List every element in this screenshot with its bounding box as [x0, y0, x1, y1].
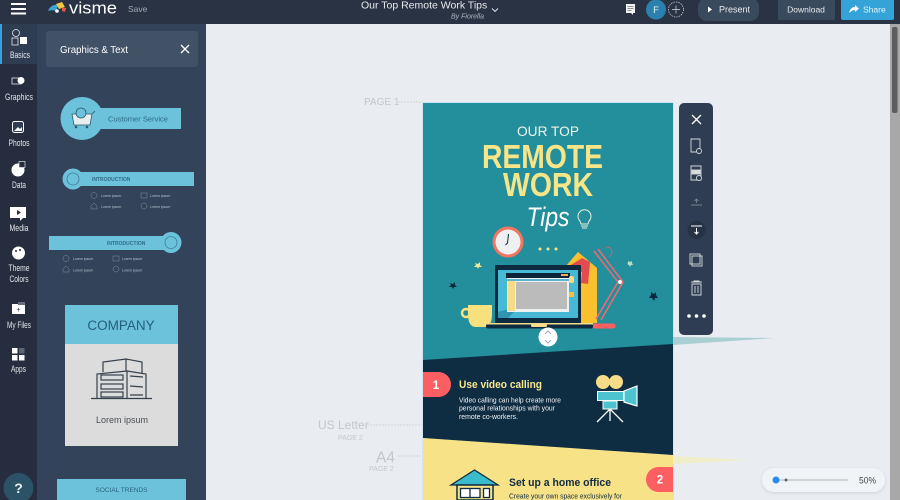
- icon: coffee cup: [462, 305, 492, 327]
- document title: [361, 0, 498, 20]
- template: introduction left: Lorem ipsum: [122, 268, 142, 272]
- icon: video camera: [596, 375, 637, 422]
- panel: left rail: [0, 24, 37, 500]
- icon: more: [687, 314, 706, 318]
- house shape behind laptop: [566, 252, 597, 323]
- panel: canvas page labels: A4: [376, 450, 395, 466]
- template: company card: [65, 305, 178, 446]
- rail item: my files: [7, 302, 31, 331]
- zoom control: [762, 468, 885, 492]
- avatar: [646, 0, 666, 20]
- icon: comment: [626, 4, 635, 15]
- title: REMOTE: [482, 138, 603, 175]
- zoom control: 50%: [859, 476, 876, 486]
- badge 2: 2: [657, 472, 664, 486]
- text block: remote co-workers.: [459, 412, 518, 421]
- template: social trends: [57, 479, 186, 500]
- section: home office band: [423, 438, 673, 500]
- panel: top bar: [0, 0, 900, 24]
- template: introduction left: [49, 232, 182, 272]
- icon: close: [692, 115, 701, 124]
- text block: Video calling can help create more: [459, 396, 561, 404]
- heading: graphics and text: Graphics & Text: [60, 44, 128, 56]
- rail item: theme colors: Colors: [10, 274, 29, 285]
- template: introduction left: Lorem ipsum: [73, 268, 93, 272]
- icon: building: [91, 359, 152, 398]
- rail item: basics: [10, 30, 30, 61]
- template: company card: COMPANY: [87, 318, 155, 333]
- badge 1: [423, 372, 451, 397]
- template: company card: Lorem ipsum: [96, 415, 148, 425]
- icon: wall clock: [492, 226, 524, 258]
- rail item: graphics: [5, 77, 33, 103]
- template: introduction right: Lorem ipsum: [150, 194, 170, 198]
- icon: laptop: [486, 265, 593, 328]
- icon: light bulb: [578, 210, 591, 228]
- rail item: apps: [11, 348, 26, 375]
- icon: house: [451, 470, 498, 500]
- template: introduction left: INTRODUCTION: [107, 241, 146, 247]
- panel: left content panel: [37, 24, 206, 500]
- panel: canvas page labels: PAGE 2: [338, 435, 363, 442]
- rail item: data: Data: [12, 180, 26, 191]
- template: introduction left: Lorem ipsum: [73, 257, 93, 261]
- logo: [48, 0, 117, 18]
- heading: Use video calling: [459, 379, 542, 391]
- document title: By Fiorella: [451, 14, 484, 20]
- button: share: Share: [863, 4, 886, 14]
- title: Tips: [526, 202, 570, 232]
- section: video calling band: [423, 344, 673, 456]
- rail item: my files: +: [16, 307, 21, 314]
- heading: Set up a home office: [509, 477, 611, 489]
- title: [482, 123, 603, 232]
- rail item: media: Media: [10, 223, 29, 234]
- icon: trash: [691, 281, 702, 295]
- rail item: media: [10, 207, 29, 234]
- avatar: F: [653, 5, 659, 16]
- title: WORK: [503, 166, 593, 203]
- title: OUR TOP: [517, 123, 579, 139]
- button: present: [698, 0, 759, 21]
- rail item: photos: [8, 122, 30, 149]
- button: download: [778, 0, 835, 20]
- template: customer service: [60, 97, 181, 140]
- template: introduction right: Lorem ipsum: [101, 194, 121, 198]
- rail item: my files: My Files: [7, 320, 31, 331]
- rail item: theme colors: [8, 246, 30, 285]
- template: introduction right: [62, 168, 194, 209]
- rail item: graphics: Graphics: [5, 92, 33, 103]
- text block: [459, 396, 561, 421]
- template: social trends: SOCIAL TRENDS: [95, 487, 148, 494]
- badge 2: [646, 467, 673, 492]
- icon: move down: [688, 221, 706, 239]
- panel: canvas page labels: PAGE 1: [364, 97, 400, 108]
- panel: canvas page labels: [318, 97, 423, 473]
- panel: canvas page labels: PAGE 2: [369, 466, 394, 473]
- add collaborator: [668, 2, 684, 17]
- button: present: Present: [719, 4, 751, 14]
- heading: graphics and text: [46, 31, 198, 67]
- page shadow wedges: [673, 337, 775, 464]
- help button: ?: [14, 480, 23, 496]
- button: download: Download: [787, 4, 825, 14]
- rail item: photos: Photos: [8, 138, 30, 149]
- panel: canvas page labels: US Letter: [318, 418, 369, 432]
- scrollbar: [890, 24, 900, 500]
- icon: add page: [691, 139, 702, 154]
- save: Save: [128, 4, 148, 14]
- rail item: theme colors: Theme: [8, 263, 30, 274]
- template: introduction right: Lorem ipsum: [150, 205, 170, 209]
- template: introduction left: Lorem ipsum: [122, 257, 142, 261]
- icon: add template: [691, 166, 702, 180]
- template: customer service: Customer Service: [108, 116, 168, 124]
- help button: [4, 473, 34, 500]
- stars: [449, 261, 658, 301]
- button: share: [841, 0, 894, 20]
- icon: desk lamp: [594, 247, 623, 326]
- icon: move up: [691, 199, 702, 205]
- text block: personal relationships with your: [459, 404, 555, 412]
- page resize handle: [538, 328, 558, 346]
- template: introduction right: Lorem ipsum: [101, 205, 121, 209]
- rail item: apps: Apps: [11, 364, 26, 375]
- dots: [538, 248, 558, 250]
- rail item: data: [12, 162, 26, 191]
- rail item: basics: Basics: [10, 50, 30, 61]
- icon: menu: [11, 4, 26, 14]
- badge 1: 1: [433, 378, 440, 392]
- panel: page toolbar: [679, 103, 713, 335]
- icon: duplicate: [690, 254, 702, 266]
- template: introduction right: INTRODUCTION: [92, 177, 131, 183]
- panel: infographic page: [422, 102, 775, 500]
